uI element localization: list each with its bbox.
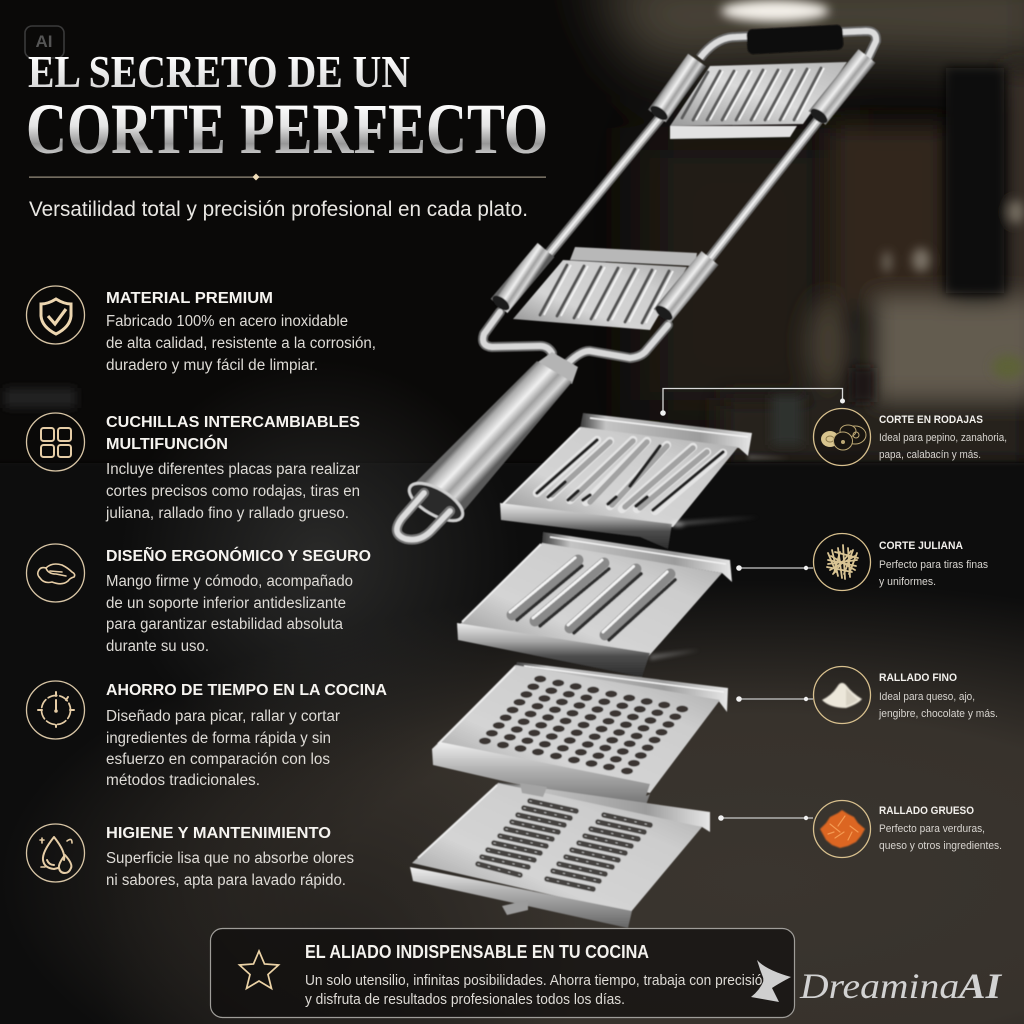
text: ahorro: métodos tradicionales. <box>106 772 260 789</box>
text: higiene <box>106 825 354 889</box>
text: rodajas: CORTE EN RODAJAS <box>879 414 983 426</box>
text: rodajas: Ideal para pepino, zanahoria, <box>879 432 1007 444</box>
cut type: rallado grueso <box>814 800 1002 858</box>
text: material premium <box>106 290 376 374</box>
plate 3: fine grater <box>432 662 728 813</box>
text: higiene: Superficie lisa que no absorbe olores <box>106 850 354 867</box>
text: juliana: CORTE JULIANA <box>879 540 963 552</box>
text: cuchillas: Incluye diferentes placas para realizar <box>106 461 360 478</box>
icon: clock <box>26 681 84 739</box>
text: diseño <box>106 545 371 655</box>
text: grueso <box>879 805 1002 852</box>
text: grueso: Perfecto para verduras, <box>879 823 985 835</box>
text: fino: jengibre, chocolate y más. <box>878 708 998 720</box>
text: material premium: duradero y muy fácil de limpiar. <box>106 357 318 374</box>
text: juliana <box>879 540 988 588</box>
feature: diseño ergonómico <box>26 544 371 655</box>
text: cuchillas: MULTIFUNCIÓN <box>106 434 228 453</box>
text: fino <box>878 672 998 720</box>
sparkles on plate corners <box>650 455 790 660</box>
text: diseño: de un soporte inferior antideslizante <box>106 595 346 612</box>
lower plate with corrugation <box>513 247 697 330</box>
text: ahorro: Diseñado para picar, rallar y cortar <box>106 708 340 725</box>
cut type: rallado fino <box>814 666 998 724</box>
feature: ahorro de tiempo <box>26 681 387 789</box>
plates exploded stack <box>410 413 752 928</box>
text: diseño: DISEÑO ERGONÓMICO Y SEGURO <box>106 545 371 565</box>
icon: slices <box>814 408 870 466</box>
connector: julienne <box>736 565 813 571</box>
text: material premium: Fabricado 100% en acero inoxidable <box>106 313 348 330</box>
title: CORTE PERFECTO <box>26 89 548 169</box>
text: higiene: ni sabores, apta para lavado rápido. <box>106 872 346 889</box>
rails <box>547 118 820 262</box>
text: diseño: Mango firme y cómodo, acompañado <box>106 573 353 590</box>
feature: material premium <box>26 286 376 374</box>
text: ahorro: ingredientes de forma rápida y sin <box>106 730 331 747</box>
plate 2: julienne <box>457 532 732 677</box>
text: material premium: de alta calidad, resistente a la corrosión, <box>106 335 376 352</box>
callout box <box>210 928 794 1018</box>
cut type: juliana <box>814 534 988 590</box>
text: cuchillas: CUCHILLAS INTERCAMBIABLES <box>106 414 360 431</box>
callout text <box>305 972 770 1008</box>
icon: fine pile <box>814 666 870 724</box>
callout heading: EL ALIADO INDISPENSABLE EN TU COCINA <box>305 942 649 962</box>
plate 1: slices <box>500 413 752 549</box>
AI badge <box>25 26 64 58</box>
text: fino: RALLADO FINO <box>879 672 957 684</box>
text: diseño: para garantizar estabilidad absoluta <box>106 616 343 633</box>
text: cuchillas: juliana, rallado fino y rallado grueso. <box>105 505 349 522</box>
lower sleeves <box>490 250 710 323</box>
connector: fine grating <box>736 696 813 702</box>
text: cuchillas <box>105 414 360 522</box>
text: grueso: RALLADO GRUESO <box>879 805 974 817</box>
text: juliana: y uniformes. <box>879 576 936 588</box>
black grip <box>746 25 844 54</box>
icon: paper bird <box>751 960 791 1002</box>
divider with diamond <box>29 174 546 180</box>
title: EL SECRETO DE UN <box>28 46 410 97</box>
top corrugated plate <box>670 62 847 139</box>
text: rodajas: papa, calabacín y más. <box>879 449 981 461</box>
text: cuchillas: cortes precisos como rodajas, tiras en <box>106 483 360 500</box>
text: juliana: Perfecto para tiras finas <box>879 559 988 571</box>
feature: cuchillas <box>26 413 360 522</box>
subtitle: Versatilidad total y precisión profesional en cada plato. <box>29 198 528 221</box>
text: material premium: MATERIAL PREMIUM <box>106 290 273 307</box>
text: grueso: queso y otros ingredientes. <box>879 840 1002 852</box>
feature: higiene <box>26 824 354 889</box>
text: higiene: HIGIENE Y MANTENIMIENTO <box>106 825 331 842</box>
handle tube and loop <box>397 352 578 540</box>
AI badge: AI <box>36 32 52 51</box>
connector: coarse grating <box>718 815 813 821</box>
lower wires <box>483 312 668 368</box>
top tube wire <box>700 31 876 62</box>
text: ahorro <box>106 682 387 789</box>
title <box>26 46 548 169</box>
icon: hand <box>26 544 84 602</box>
upper sleeves <box>648 56 867 126</box>
text: ahorro: esfuerzo en comparación con los <box>106 751 330 768</box>
connector: bracket to slices <box>660 388 845 416</box>
callout text: y disfruta de resultados profesionales todos los días. <box>305 991 625 1008</box>
product: slicer frame and handle <box>397 25 876 540</box>
icon: grated carrot <box>814 800 870 858</box>
text: diseño: durante su uso. <box>106 638 209 655</box>
text: fino: Ideal para queso, ajo, <box>879 691 975 703</box>
text: ahorro: AHORRO DE TIEMPO EN LA COCINA <box>106 682 387 699</box>
watermark logo: Dreamina AI <box>799 966 1003 1006</box>
callout text: Un solo utensilio, infinitas posibilidades. Ahorra tiempo, trabaja con precisión <box>305 972 770 989</box>
icon: star <box>240 951 278 988</box>
cut type: rodajas <box>814 408 1007 466</box>
plate 4: coarse grater <box>410 782 710 928</box>
icon: julienne strips <box>814 534 870 590</box>
icon: shield <box>26 286 84 344</box>
text: rodajas <box>879 414 1007 461</box>
icon: grid <box>26 413 84 471</box>
watermark logo <box>751 960 1003 1006</box>
icon: water drops <box>26 824 84 882</box>
